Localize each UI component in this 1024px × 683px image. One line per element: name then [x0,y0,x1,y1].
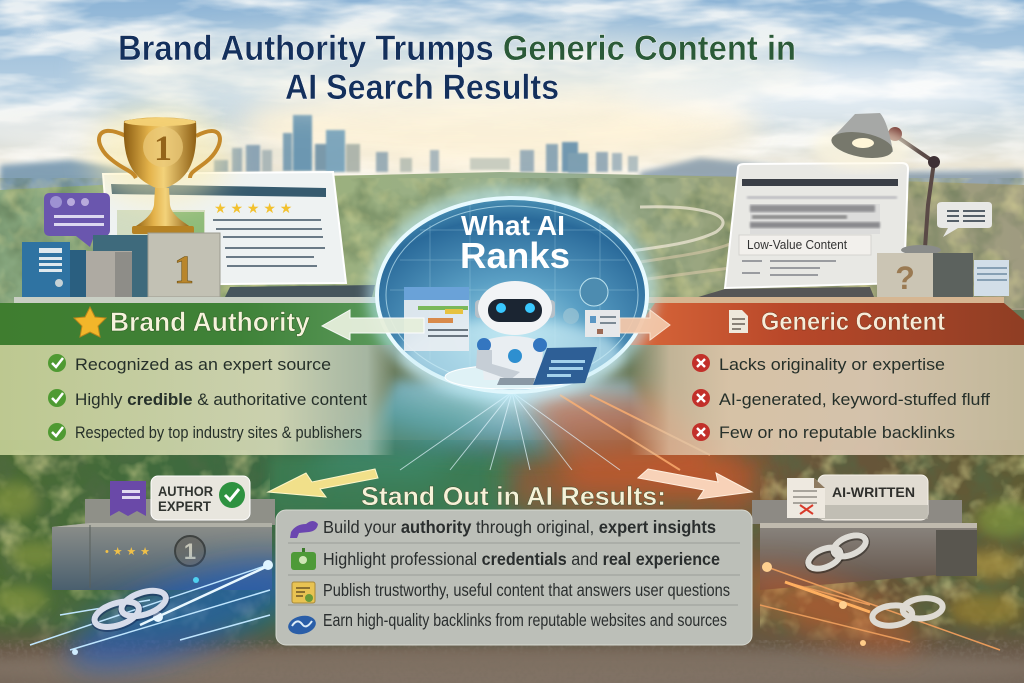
tips card [276,510,752,645]
data cards [404,278,620,351]
tip: trustworthy: Publish trustworthy, useful content that answers user questions [323,580,730,600]
laptop with low-value content [695,163,908,298]
panel: Generic Content [625,303,1024,455]
icon: crossed document [787,478,825,518]
central glow fan below the orb [300,380,760,490]
arrow: to AI-written pedestal [638,469,752,499]
tip: trustworthy [292,580,730,603]
checklist: Highly credible & authoritative content [75,390,367,409]
icon: chain link [91,586,170,633]
speech bubble [937,202,992,237]
heading [460,210,570,276]
tip: authority: Build your authority through original, expert insights [323,517,716,537]
laptop with low-value content: Low-Value Content [747,238,847,252]
tip: backlinks: Earn high-quality backlinks from reputable websites and sources [323,610,727,630]
icon: document [729,310,748,333]
desk lamp [812,113,941,255]
badge: number 1 [175,536,205,566]
checklist: Respected by top industry sites & publishers [75,423,362,442]
x list: Lacks originality or expertise [719,355,945,374]
panel body [0,345,395,455]
heading: Stand Out in AI Results: [361,481,666,511]
x list: Few or no reputable backlinks [719,423,955,442]
arrow: to author expert pedestal [268,469,378,497]
center orb: What AI Ranks [367,187,657,403]
x list [692,354,990,442]
podium blocks: 1 [174,247,194,292]
panel body [630,345,1024,455]
pedestal: AI-written [731,475,1000,669]
icon: purple document [110,481,146,516]
checklist: Recognized as an expert source [75,355,331,374]
tip: credentials: Highlight professional credentials and real experience [323,549,720,569]
stars: •★★★ [105,546,150,558]
red header [625,303,1024,345]
x list: AI-generated, keyword-stuffed fluff [719,390,990,409]
title [80,28,820,112]
title: AI Search Results [285,68,559,107]
tip: backlinks [286,610,727,637]
heading: What AI [461,210,565,241]
badge: number 1: 1 [184,539,196,564]
icon: chain link lower [871,596,944,628]
question box [648,253,1009,303]
browser window with reviews: ★ ★ ★ ★ ★ [214,200,292,216]
green header [0,303,400,345]
purple speech bubble [44,193,110,247]
glowing orange lines [731,551,1000,669]
gold trophy [90,105,230,234]
arrow: to Brand Authority [322,310,424,340]
lower landscape: forest, glowing paths and dirt [0,440,1024,683]
question box: ? [895,260,915,296]
icon: star [74,307,106,337]
heading: Brand Authority [110,307,310,337]
right scene: laptop, lamp, question box [648,113,1009,303]
skyline [214,115,638,173]
panel: Stand Out in AI Results [276,481,752,645]
gold trophy: 1 [154,128,172,168]
podium blocks [14,233,376,303]
arrow: to Generic Content [620,310,670,340]
author expert card: EXPERT [158,499,212,514]
background scene: sky, skyline, landscape [0,0,1024,310]
heading: Ranks [460,235,570,276]
pedestal: author expert [30,476,315,683]
robot with laptop [445,281,597,389]
panel: Brand Authority [0,303,400,455]
author expert card: AUTHOR [158,484,213,499]
glowing blue network lines [30,537,315,683]
icon: chain link upper [805,531,870,574]
heading: Generic Content [761,308,946,336]
checklist [48,354,367,442]
title: Brand Authority Trumps Generic Content in [118,29,796,68]
author expert card [151,476,250,520]
ai-written card: AI-WRITTEN [832,485,915,500]
left scene: trophy, podium, browser window [14,105,376,303]
ai-written card [818,475,928,520]
browser window with reviews [103,172,375,297]
